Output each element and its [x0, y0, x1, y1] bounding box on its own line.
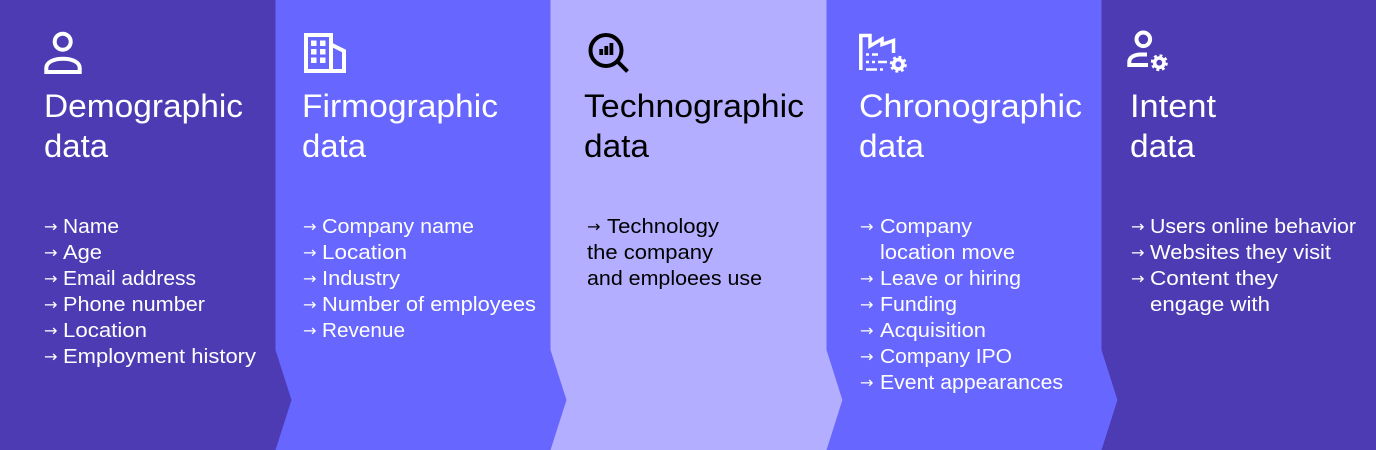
panel: firmographic data	[276, 0, 567, 450]
list: chronographic attributes: location move	[880, 242, 1015, 264]
list: firmographic attributes: →	[303, 269, 316, 288]
panel: intent data	[1102, 0, 1376, 450]
list: demographic attributes: Email address	[63, 268, 196, 290]
icon: factory with gear	[861, 36, 905, 71]
list: chronographic attributes: Company IPO	[880, 346, 1012, 368]
icon: person	[46, 34, 80, 72]
panel: demographic data	[0, 0, 292, 450]
list: demographic attributes: Location	[63, 320, 147, 342]
list: chronographic attributes: Funding	[880, 294, 957, 316]
heading: technographic: Technographic	[584, 88, 804, 124]
heading: demographic	[44, 88, 243, 164]
heading: firmographic: Firmographic	[302, 88, 498, 124]
list: firmographic attributes: Industry	[322, 268, 400, 290]
list: chronographic attributes: →	[860, 217, 874, 236]
list: intent attributes: engage with	[1150, 294, 1270, 316]
heading: chronographic: data	[859, 128, 924, 164]
icon: office building	[306, 35, 344, 71]
heading: intent: Intent	[1130, 88, 1216, 124]
list: technographic attributes	[587, 216, 762, 290]
list: demographic attributes: Phone number	[63, 294, 205, 316]
list: chronographic attributes: →	[860, 321, 874, 340]
list: firmographic attributes: →	[303, 295, 316, 314]
list: chronographic attributes	[860, 216, 1063, 394]
list: demographic attributes: →	[44, 217, 58, 236]
list: intent attributes	[1131, 216, 1356, 316]
list: firmographic attributes: Revenue	[322, 320, 405, 342]
list: intent attributes: Users online behavior	[1150, 216, 1356, 238]
list: chronographic attributes: →	[860, 269, 874, 288]
heading: chronographic: Chronographic	[859, 88, 1082, 124]
icon: person with gear	[1129, 32, 1166, 70]
list: intent attributes: →	[1131, 217, 1144, 236]
list: demographic attributes: →	[44, 347, 58, 366]
list: demographic attributes: →	[44, 295, 58, 314]
heading: firmographic	[302, 88, 498, 164]
list: intent attributes: →	[1131, 269, 1144, 288]
list: chronographic attributes: Leave or hiring	[880, 268, 1021, 290]
heading: demographic: data	[44, 128, 108, 164]
list: demographic attributes: Name	[63, 216, 119, 238]
list: chronographic attributes: →	[860, 373, 874, 392]
list: intent attributes: Content they	[1150, 268, 1278, 290]
list: demographic attributes: Age	[63, 242, 102, 264]
list: technographic attributes: Technology	[607, 216, 719, 238]
heading: intent	[1130, 88, 1216, 164]
heading: technographic	[584, 88, 804, 164]
list: demographic attributes: Employment history	[63, 346, 256, 368]
list: firmographic attributes: Location	[322, 242, 407, 264]
heading: firmographic: data	[302, 128, 366, 164]
list: firmographic attributes: →	[303, 321, 316, 340]
list: demographic attributes: →	[44, 269, 58, 288]
list: chronographic attributes: →	[860, 347, 874, 366]
list: intent attributes: Websites they visit	[1150, 242, 1331, 264]
list: demographic attributes: →	[44, 243, 58, 262]
panel: technographic data	[550, 0, 842, 450]
heading: chronographic	[859, 88, 1082, 164]
heading: technographic: data	[584, 128, 649, 164]
list: technographic attributes: the company	[587, 242, 713, 264]
heading: intent: data	[1130, 128, 1195, 164]
heading: demographic: Demographic	[44, 88, 243, 124]
list: demographic attributes: →	[44, 321, 58, 340]
list: chronographic attributes: →	[860, 295, 874, 314]
list: technographic attributes: →	[587, 217, 600, 236]
list: technographic attributes: and emploees use	[587, 268, 762, 290]
list: firmographic attributes	[303, 216, 536, 342]
list: chronographic attributes: Acquisition	[880, 320, 986, 342]
list: firmographic attributes: Company name	[322, 216, 474, 238]
list: chronographic attributes: Company	[880, 216, 972, 238]
list: chronographic attributes: Event appearances	[880, 372, 1063, 394]
list: firmographic attributes: Number of employees	[322, 294, 536, 316]
panel: chronographic data	[826, 0, 1118, 450]
list: intent attributes: →	[1131, 243, 1144, 262]
icon: magnifier with bar chart	[590, 35, 628, 72]
list: firmographic attributes: →	[303, 217, 316, 236]
list: firmographic attributes: →	[303, 243, 316, 262]
list: demographic attributes	[44, 216, 256, 368]
